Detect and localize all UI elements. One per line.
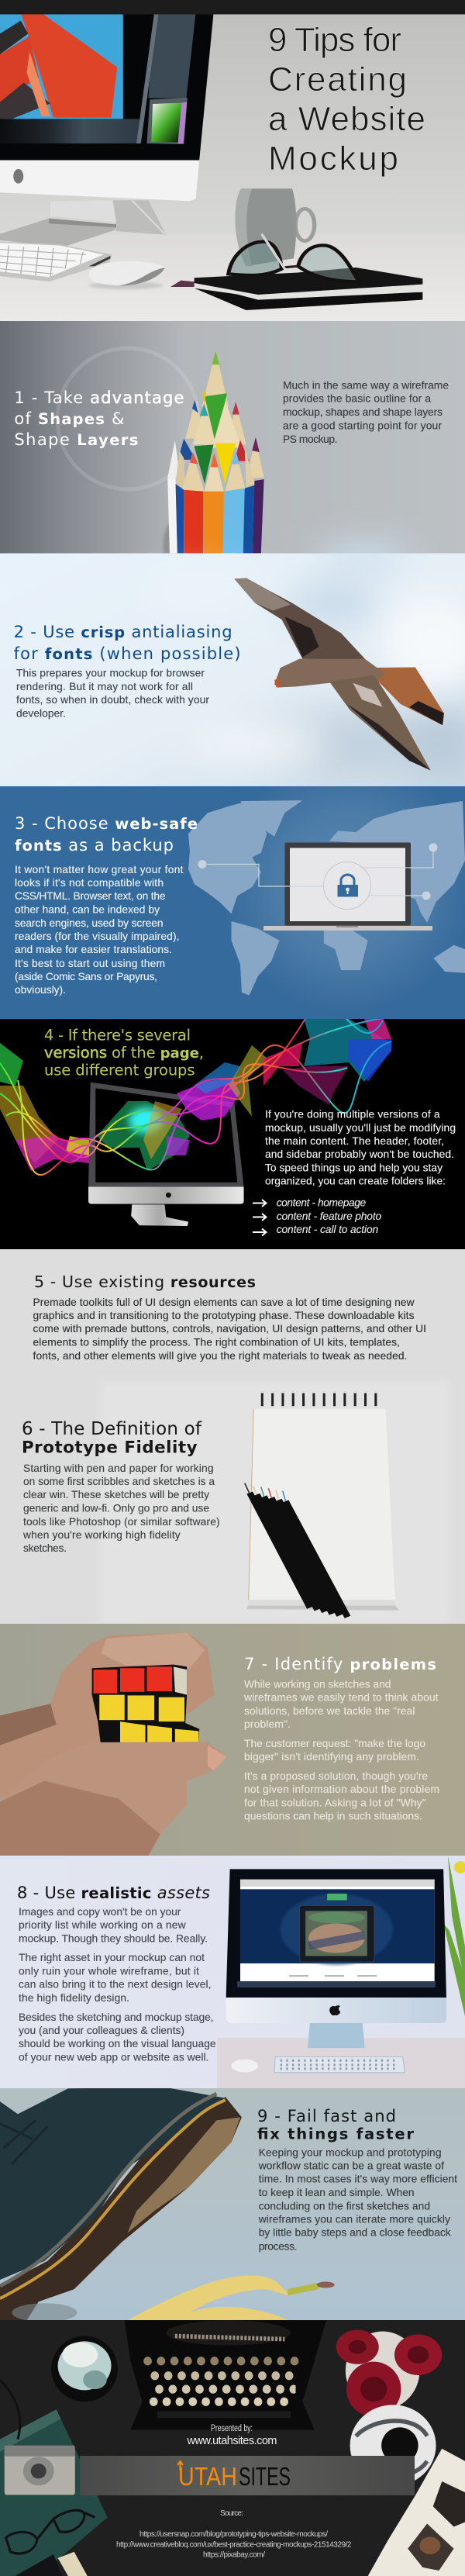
body text: It's best to start out using them (15, 958, 165, 969)
body text (22, 1462, 220, 1554)
typewriter (125, 2320, 326, 2430)
body text: wireframes you can iterate more quickly (258, 2214, 450, 2226)
background (0, 1624, 465, 1856)
heading: 2 - Use crisp antialiasing (14, 623, 232, 641)
body text: graphics and in transitioning to the prototyping phase. These downloadable kits (33, 1310, 415, 1321)
body text: looks if it's not compatible with (15, 877, 164, 889)
folder list with arrows: content - feature photo (277, 1210, 382, 1222)
clouds (147, 544, 465, 779)
body text: provides the basic outline for a (283, 392, 431, 405)
heading: for fonts (when possible) (14, 644, 241, 663)
body text: sketches. (23, 1542, 67, 1554)
panel: footer (0, 2320, 465, 2576)
body text: of your new web app or website as well. (19, 2052, 208, 2063)
body text: Images and copy won't be on your (19, 1906, 181, 1918)
folder list with arrows: content - call to action (277, 1224, 379, 1235)
body text: developer. (16, 707, 66, 720)
eyeglasses (6, 2510, 95, 2554)
background (0, 1019, 465, 1250)
body text: process. (259, 2240, 298, 2252)
illustration: desk objects (0, 2320, 465, 2576)
title: 9 Tips for (268, 21, 401, 59)
body text: the main content. The header, footer, (265, 1135, 444, 1147)
body text (33, 1297, 426, 1362)
heading (14, 623, 241, 663)
body text: This prepares your mockup for browser (16, 667, 205, 679)
heading (44, 1026, 204, 1079)
body text: CSS/HTML. Browser text, on the (15, 890, 166, 902)
body text (16, 667, 209, 720)
body text: search engines, used by screen (15, 917, 163, 929)
body text: are a good starting point for your (283, 420, 442, 431)
body text: only ruin your whole wireframe, but it (19, 1965, 199, 1977)
illustration: iMac with website (226, 1869, 446, 2073)
body text: generic and low-fi. Only go pro and use (23, 1503, 209, 1514)
succulent bowl (51, 2336, 118, 2402)
body text: It won't matter how great your font (15, 864, 184, 875)
panel: tip 5 existing resources (33, 1272, 426, 1362)
heading: 3 - Choose web-safe (15, 814, 198, 833)
corner book and paper (15, 2554, 62, 2576)
illustration: iMac monitor on desk (0, 13, 214, 247)
body text: fonts, and other elements will give you the right materials to tweak as needed. (33, 1350, 408, 1362)
body text: wireframes we easily tend to think about (243, 1692, 439, 1704)
heading: fonts as a backup (15, 836, 174, 855)
sky background (0, 554, 465, 786)
heading: 6 - The Definition of (22, 1419, 202, 1439)
body text: should be working on the visual language (19, 2038, 216, 2049)
body text: elements to simplify the process. The right combination of UI kits, templates, (33, 1337, 400, 1348)
panel: tip 9 fail fast (0, 2087, 465, 2322)
illustration: soaring eagle (234, 578, 444, 771)
illustration: keyboard (0, 242, 112, 281)
sources: http://www.creativebloq.com/ux/best-practice-creating-mockups-21514329/2 (116, 2540, 352, 2550)
body text: when you're working high fidelity (22, 1529, 181, 1541)
heading: 5 - Use existing resources (34, 1272, 256, 1291)
sources (116, 2509, 352, 2559)
body text (258, 2146, 457, 2252)
heading: use different groups (44, 1062, 195, 1079)
body text: readers (for the visually impaired), (15, 931, 180, 942)
body text: It's a proposed solution, though you're (244, 1770, 428, 1782)
wall background (0, 14, 465, 235)
body text: obviously). (15, 984, 66, 996)
illustration: mouse (89, 261, 165, 289)
heading: fix things faster (257, 2125, 414, 2143)
website address: www.utahsites.com (186, 2435, 277, 2447)
body text: come with premade buttons, controls, navigation, UI design patterns, and other UI (33, 1323, 426, 1335)
background (0, 321, 465, 554)
folder list with arrows: content - homepage (277, 1197, 367, 1208)
body text: other hand, can be indexed by (15, 904, 160, 915)
body text: and sidebar probably won't be touched. (265, 1148, 454, 1160)
connector lines (202, 848, 433, 896)
body text: not given information about the problem (244, 1784, 439, 1795)
body text: solutions, before we tackle the "real (244, 1705, 415, 1717)
panel: tip 8 realistic assets (0, 1856, 465, 2088)
illustration: laptop with padlock (198, 842, 437, 931)
body text: Besides the sketching and mockup stage, (19, 2011, 214, 2023)
illustration: notebook and glasses (170, 234, 422, 310)
body text: workflow static can be a great waste of (258, 2160, 444, 2172)
body text: by little baby steps and a close feedback (259, 2227, 451, 2238)
panel: tip 1 shapes (0, 321, 465, 575)
body text: Premade toolkits full of UI design elements can save a lot of time designing new (33, 1297, 415, 1308)
body text: organized, you can create folders like: (265, 1176, 446, 1187)
panel: tips 5 and 6 background (0, 1249, 465, 1624)
body text: mockup, usually you'll just be modifying (265, 1122, 456, 1134)
body text: Much in the same way a wireframe (283, 380, 449, 391)
logo band (80, 2456, 415, 2495)
heading (14, 388, 184, 449)
illustration: monitor (88, 1083, 244, 1226)
title: a Website (268, 100, 425, 138)
heading: 9 - Fail fast and (257, 2107, 396, 2125)
dark wood background (0, 2320, 465, 2576)
title: Creating (268, 60, 407, 98)
desk surface (0, 234, 465, 321)
background (0, 786, 465, 1019)
heading: of Shapes & (14, 409, 124, 428)
body text: Keeping your mockup and prototyping (259, 2146, 442, 2158)
body text: to keep it lean and simple. When (259, 2187, 415, 2198)
heading: versions of the page, (44, 1044, 204, 1062)
logo: Utah Sites: SITES (239, 2462, 291, 2491)
body text: To speed things up and help you stay (265, 1162, 443, 1174)
heading (15, 814, 198, 855)
panel: hero header (0, 13, 465, 321)
panel: tip 7 identify problems (0, 1624, 465, 1856)
body text: questions can help in such situations. (244, 1811, 422, 1822)
sources: Source: (220, 2509, 243, 2518)
body text: concluding on the first sketches and (259, 2200, 430, 2212)
logo: Utah Sites (177, 2461, 291, 2491)
body text: bigger" isn't identifying any problem. (244, 1751, 419, 1763)
body text: rendering. But it may not work for all (16, 681, 193, 692)
camera (0, 2380, 75, 2495)
illustration: rainbow smoke ribbons (0, 1006, 391, 1175)
panel: tip 4 several versions (0, 1019, 456, 1236)
panel: tip 2 crisp fonts (0, 544, 465, 786)
illustration: hands holding rubik's cube (0, 1632, 227, 1856)
body text: tools like Photoshop (or similar software) (23, 1516, 220, 1528)
top dark strip (0, 0, 465, 14)
illustration: spiral notebook and pencils (245, 1400, 399, 1617)
body text: the high fidelity design. (19, 1992, 129, 2004)
heading: 1 - Take advantage (14, 388, 184, 407)
heading: 8 - Use realistic assets (17, 1884, 210, 1902)
body text: clear win. These sketches will be pretty (23, 1489, 209, 1500)
icon: padlock (338, 875, 358, 896)
panel: tip 3 web-safe fonts (0, 786, 465, 1019)
teal book (0, 2409, 108, 2576)
panel: tip 6 prototype fidelity (22, 1400, 399, 1617)
paper stack and stamps (368, 2449, 465, 2576)
body text: on some first scribbles and sketches is a (23, 1476, 215, 1487)
body text (283, 380, 449, 445)
body text: The right asset in your mockup can not (19, 1952, 205, 1963)
decorative ring (57, 348, 198, 489)
heading: Prototype Fidelity (22, 1438, 198, 1458)
body text: If you're doing multiple versions of a (265, 1109, 440, 1120)
background (0, 1856, 465, 2088)
body text (19, 1906, 216, 2063)
coffee cup (350, 2405, 436, 2486)
illustration: mug (235, 188, 315, 266)
radial glow (240, 786, 456, 994)
body text (15, 864, 184, 996)
presented by text: Presented by: (211, 2424, 253, 2433)
body text: time. In most cases it's way more efficient (259, 2174, 457, 2185)
light paper surface (101, 1380, 450, 1624)
body text: PS mockup. (283, 433, 338, 445)
table surface (217, 2038, 465, 2088)
sources: https://pixabay.com/ (203, 2551, 265, 2559)
body text: problem". (244, 1718, 291, 1730)
title (268, 21, 425, 178)
heading (22, 1419, 202, 1458)
body text (243, 1678, 439, 1822)
body text: and make for easier translations. (15, 944, 172, 955)
body text: priority list while working on a new (19, 1919, 186, 1931)
world map (188, 800, 465, 996)
body text: you (and your colleagues & clients) (19, 2025, 184, 2036)
body text: can also bring it to the next design level, (19, 1979, 211, 1991)
body text: mockup, shapes and shape layers (283, 406, 443, 418)
illustration: boot and banana peel (0, 2087, 335, 2322)
heading (257, 2107, 414, 2143)
illustration: coloured pencils (163, 351, 264, 575)
body text: (aside Comic Sans or Papyrus, (15, 971, 157, 982)
body text: fonts, so when in doubt, check with your (16, 694, 209, 706)
body text: While working on sketches and (244, 1678, 391, 1690)
roses on plate (336, 2329, 442, 2417)
body text: The customer request: "make the logo (244, 1738, 425, 1749)
body text: Starting with pen and paper for working (23, 1462, 214, 1474)
heading: 7 - Identify problems (244, 1655, 436, 1673)
body text: for that solution. Asking a lot of "Why" (244, 1797, 426, 1808)
body text (265, 1109, 456, 1187)
concrete background (0, 2088, 465, 2320)
title: Mockup (268, 140, 398, 178)
folder list with arrows (253, 1197, 382, 1236)
logo: Utah Sites: UTAH (178, 2462, 237, 2491)
sources: https://usersnap.com/blog/prototyping-tips-website-mockups/ (140, 2530, 328, 2539)
body text: mockup. Though they should be. Really. (19, 1932, 208, 1944)
heading: Shape Layers (14, 430, 138, 449)
heading: 4 - If there's several (44, 1026, 191, 1044)
illustration: daffodil leaves (443, 1856, 465, 2016)
